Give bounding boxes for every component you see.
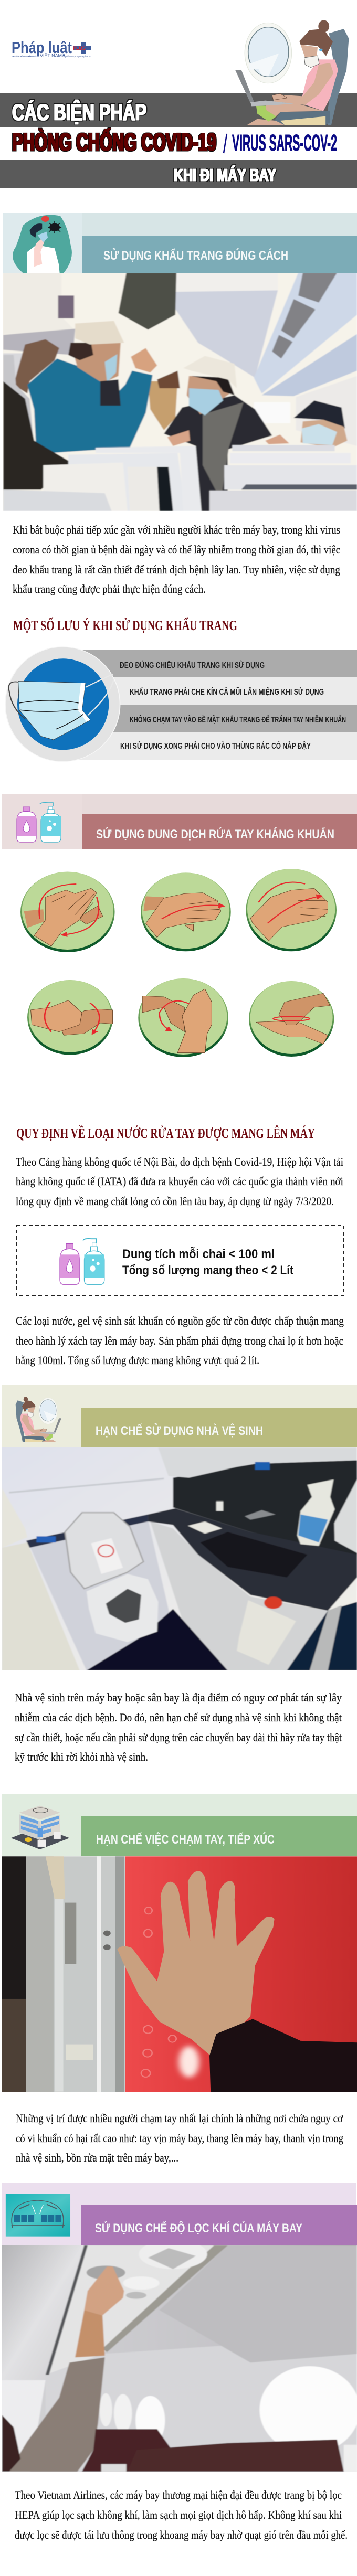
title: [12, 99, 337, 185]
icon: sanitizer bottles: [17, 803, 61, 842]
photo: hand adjusting overhead air vent: [0, 2239, 357, 2476]
heading: SỬ DỤNG CHẾ ĐỘ LỌC KHÍ CỦA MÁY BAY: [95, 2220, 302, 2236]
panel: section 2 sanitizer: [2, 794, 357, 1367]
text block: IATA advice: [16, 1155, 343, 1208]
logo: Pháp luật Plus: TRUYỀN THÔNG PHÁP LUẬT: [12, 54, 37, 58]
step 5: [138, 978, 228, 1057]
step 3: [246, 869, 337, 951]
text block: HEPA filter: [15, 2488, 348, 2541]
logo: Pháp luật Plus: PLUS: [73, 46, 86, 51]
step 2: [141, 872, 231, 951]
text block: allowed gels: bằng 100ml. Tổng số lượng được mang không vượt quá 2 lít.: [16, 1354, 259, 1367]
header illustration bands: [0, 93, 357, 188]
heading: SỬ DỤNG KHẨU TRANG ĐÚNG CÁCH: [103, 248, 288, 263]
panel: mask tips list: [5, 647, 357, 762]
callout: liquid limits: [16, 1225, 343, 1296]
text block: toilet advice: kỹ trước khi rời khỏi nhà vệ sinh.: [15, 1750, 148, 1763]
icon: surgical mask in circle: [5, 647, 120, 762]
title line 1: CÁC BIỆN PHÁP: [12, 99, 146, 125]
text block: touch points: [16, 2112, 343, 2164]
header band: [2, 2183, 357, 2245]
icon: man with mask and viruses: [13, 215, 72, 273]
stripes: [79, 650, 357, 760]
total limit: Tổng số lượng mang theo < 2 Lít: [122, 1263, 293, 1278]
step 1: [20, 872, 115, 952]
step 6: [249, 981, 334, 1057]
text block: allowed gels: [16, 1314, 344, 1367]
photo: airplane lavatory: [0, 1446, 357, 1674]
tip 1: ĐEO ĐÚNG CHIỀU KHẨU TRANG KHI SỬ DỤNG: [120, 660, 265, 670]
text block: intro: khẩu trang cũng được phải thực hiện đúng cách.: [13, 582, 206, 595]
photo: hand on red aircraft door: [2, 1856, 357, 2092]
header band: [2, 1385, 357, 1447]
header band: [3, 213, 357, 273]
panel: section 1 mask: [0, 213, 357, 762]
panel: section 3 toilet: [0, 1385, 357, 1763]
icon: woman by window: [16, 1397, 61, 1442]
heading: HẠN CHẾ SỬ DỤNG NHÀ VỆ SINH: [96, 1423, 263, 1438]
logo: Pháp luật Plus: Pháp luật: [12, 38, 72, 57]
logo: Pháp luật Plus: http://www.phapluatplus.vn: [62, 55, 91, 58]
subheading: mask notes: MỘT SỐ LƯU Ý KHI SỬ DỤNG KHẨU TRANG: [13, 617, 237, 633]
header band: [2, 794, 357, 849]
icon: bottles: [60, 1239, 104, 1284]
icons: six hand washing steps: [20, 869, 337, 1057]
panel: section 5 air filter: [0, 2183, 357, 2541]
title line 2: covid: PHÒNG CHỐNG COVID-19: [12, 128, 216, 156]
photo: passengers wearing masks in cabin: [0, 273, 357, 511]
text block: toilet advice: [15, 1691, 342, 1763]
title line 2: slash: [224, 134, 227, 153]
header band: [2, 1794, 357, 1856]
panel: section 4 touching: [2, 1794, 357, 2164]
text block: touch points: nhà vệ sinh, bồn rửa mặt trên máy bay,...: [16, 2151, 178, 2164]
title line 3: KHI ĐI MÁY BAY: [174, 165, 276, 185]
illustration: woman with mask on plane: [235, 20, 349, 125]
logo: Pháp luật Plus: VIỆT NAM: [40, 53, 62, 58]
icon: cabin airflow diagram: [6, 2194, 70, 2237]
limit per bottle: Dung tích mỗi chai < 100 ml: [122, 1247, 275, 1261]
icon: hospital building: [11, 1806, 69, 1849]
text block: intro: [13, 523, 340, 595]
heading: HẠN CHẾ VIỆC CHẠM TAY, TIẾP XÚC: [96, 1832, 275, 1847]
step 4: [27, 980, 113, 1055]
